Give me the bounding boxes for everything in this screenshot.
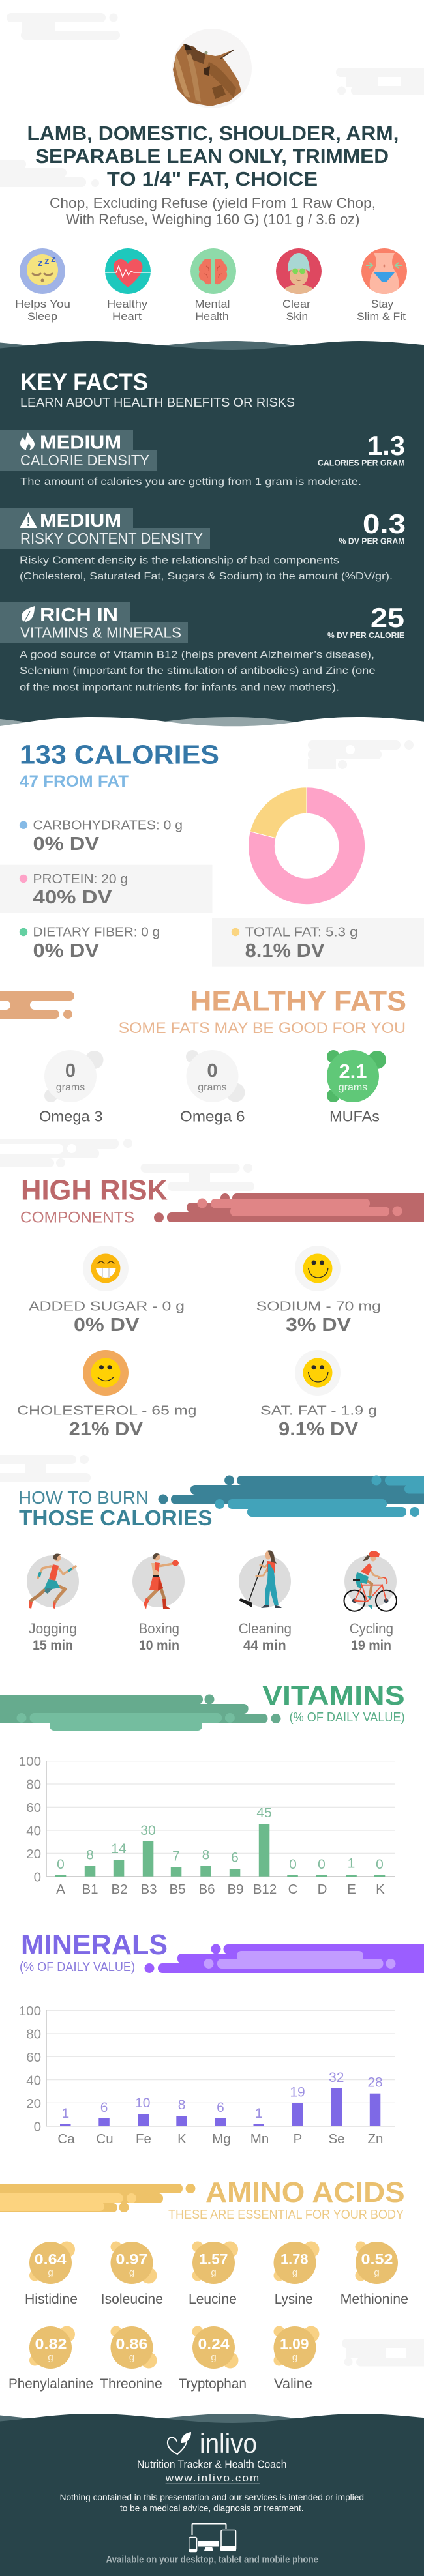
risk item: added sugar: 0% DV xyxy=(74,1315,140,1336)
bar chart: vitamins: 1 xyxy=(348,1856,355,1871)
amino acid: valine: g xyxy=(292,2352,297,2363)
bar chart: vitamins: 8 xyxy=(202,1848,209,1863)
health benefit labels: Stay xyxy=(371,298,393,310)
risk item: saturated fat: SAT. FAT - 1.9 g xyxy=(260,1404,377,1418)
bar chart: minerals: 19 xyxy=(290,2085,305,2100)
bar chart: vitamins: A xyxy=(56,1882,65,1897)
heading: 133 calories: 133 CALORIES xyxy=(20,740,219,770)
macro: carbohydrates: 0% DV xyxy=(33,834,100,855)
badge: MUFAs xyxy=(327,1050,386,1125)
fact: risky content density: Risky Content density is the relationship of bad components xyxy=(20,555,339,566)
bar chart: vitamins: 0 xyxy=(376,1857,384,1872)
badge: MUFAs: 2.1 xyxy=(339,1060,367,1083)
amino acid: isoleucine: 0.97 xyxy=(115,2251,147,2268)
amino acid: leucine: 1.57 xyxy=(199,2251,228,2268)
panel: footer xyxy=(0,2414,424,2576)
subtitle: With Refuse, Weighing 160 G) (101 g / 3.6 oz) xyxy=(66,211,360,227)
risk item: saturated fat: 9.1% DV xyxy=(279,1419,359,1440)
macro: dietary fiber xyxy=(20,926,160,961)
title xyxy=(27,122,399,190)
macro: total fat xyxy=(212,918,424,967)
amino acid: lysine: 1.78 xyxy=(280,2251,309,2268)
amino acid: valine xyxy=(274,2326,320,2392)
decorative bar: high risk xyxy=(154,1193,424,1222)
fact: rich in vitamins and minerals: A good source of Vitamin B12 (helps prevent Alzheimer’s disease), xyxy=(20,649,374,661)
fact: risky content density: 0.3 xyxy=(363,508,406,539)
activity: jogging: 15 min xyxy=(33,1638,73,1653)
fact: calorie density: CALORIE DENSITY xyxy=(20,452,149,469)
badge: omega 3: Omega 3 xyxy=(39,1108,103,1125)
fact: rich in vitamins and minerals: RICH IN xyxy=(40,605,118,626)
bar chart: vitamins: K xyxy=(376,1882,385,1897)
decorative bar: healthy fats xyxy=(0,991,74,1019)
disclaimer: to be a medical advice, diagnosis or treatment. xyxy=(120,2503,304,2513)
background cloud: left of high risk xyxy=(0,1139,132,1167)
subheading: learn about: LEARN ABOUT HEALTH BENEFITS OR RISKS xyxy=(20,396,295,410)
activity: cycling: Cycling xyxy=(350,1620,393,1637)
bar chart: minerals: 80 xyxy=(26,2027,41,2042)
amino acid: phenylalanine xyxy=(8,2326,93,2392)
fact: rich in vitamins and minerals: Selenium (important for the stimulation of antibodies) and Zinc (one xyxy=(20,666,376,677)
health benefit labels xyxy=(15,298,406,323)
bar chart: minerals: 28 xyxy=(367,2075,383,2090)
subheading: vitamins percent of daily value: (% OF DAILY VALUE) xyxy=(290,1710,405,1725)
health benefit labels: Slim & Fit xyxy=(357,310,406,323)
heading: vitamins: VITAMINS xyxy=(262,1680,405,1710)
amino acid: threonine: g xyxy=(129,2352,134,2363)
amino acid: methionine: g xyxy=(374,2267,380,2278)
amino acid: threonine: Threonine xyxy=(100,2377,162,2392)
bar chart: vitamins: 40 xyxy=(26,1824,41,1838)
amino acid: lysine: g xyxy=(292,2267,297,2278)
bar chart: vitamins: B5 xyxy=(169,1882,186,1897)
icon: clear skin xyxy=(276,248,322,295)
bar chart: minerals: 40 xyxy=(26,2073,41,2088)
macro: carbohydrates xyxy=(20,819,183,855)
heading: key facts: KEY FACTS xyxy=(20,369,148,395)
bar chart: vitamins: 0 xyxy=(34,1869,41,1885)
activity: cycling xyxy=(344,1551,397,1653)
fact: calorie density: MEDIUM xyxy=(40,433,121,454)
heading: amino acids: AMINO ACIDS xyxy=(205,2177,405,2208)
amino acid: lysine: Lysine xyxy=(275,2292,313,2307)
title: TO 1/4" FAT, CHOICE xyxy=(107,168,318,190)
fact: risky content density: % DV PER GRAM xyxy=(339,536,404,546)
amino acid: histidine xyxy=(25,2241,78,2307)
fact: risky content density: MEDIUM xyxy=(40,510,121,531)
amino acid: histidine: Histidine xyxy=(25,2292,78,2307)
panel: key facts xyxy=(0,341,424,726)
tagline: Nutrition Tracker & Health Coach xyxy=(137,2458,287,2471)
amino acid: leucine xyxy=(189,2241,238,2307)
health benefit labels: Clear xyxy=(282,298,310,310)
subheading: some fats: SOME FATS MAY BE GOOD FOR YOU xyxy=(119,1019,406,1037)
risk item: sodium: SODIUM - 70 mg xyxy=(256,1300,381,1314)
amino acid: isoleucine: Isoleucine xyxy=(101,2292,163,2307)
fact: rich in vitamins and minerals: 25 xyxy=(371,602,404,633)
bar chart: vitamins: 45 xyxy=(256,1806,272,1821)
amino acid: tryptophan: Tryptophan xyxy=(179,2377,247,2392)
amino acid: leucine: Leucine xyxy=(189,2292,237,2307)
activity: boxing xyxy=(132,1553,185,1653)
activity: cycling: 19 min xyxy=(351,1638,391,1653)
subtitle: Chop, Excluding Refuse (yield From 1 Raw Chop, xyxy=(50,195,376,211)
bar chart: vitamins: 80 xyxy=(26,1777,41,1793)
amino acid: methionine xyxy=(341,2241,408,2307)
activity: boxing: 10 min xyxy=(139,1638,179,1653)
macro: total fat: 8.1% DV xyxy=(245,941,325,961)
activity: jogging xyxy=(27,1553,79,1653)
subheading: components: COMPONENTS xyxy=(20,1209,134,1227)
fact: risky content density: (Cholesterol, Saturated Fat, Sugars & Sodium) to the amount (%DV/gr). xyxy=(20,571,393,582)
risk item: added sugar: ADDED SUGAR - 0 g xyxy=(29,1300,185,1314)
bar chart: vitamins: 0 xyxy=(289,1857,297,1872)
bar chart: vitamins: C xyxy=(288,1882,298,1897)
bar chart: vitamins: B9 xyxy=(227,1882,244,1897)
logo: inlivo xyxy=(168,2428,257,2459)
bar chart: vitamins: B2 xyxy=(111,1882,128,1897)
bar chart: vitamins: 100 xyxy=(19,1754,41,1769)
subheading: minerals percent of daily value: (% OF DAILY VALUE) xyxy=(20,1960,135,1974)
macro: dietary fiber: DIETARY FIBER: 0 g xyxy=(33,926,160,940)
bar chart: vitamins: 20 xyxy=(26,1847,41,1862)
background cloud: amino acids xyxy=(342,2339,424,2366)
bar chart: minerals: Se xyxy=(328,2131,345,2146)
bar chart: minerals: 32 xyxy=(329,2070,344,2085)
bar chart: minerals: 20 xyxy=(26,2096,41,2111)
risk item: saturated fat xyxy=(260,1350,377,1440)
icon: helps you sleep: z xyxy=(51,254,56,265)
activity: cleaning: Cleaning xyxy=(239,1620,292,1637)
subtitle xyxy=(50,195,376,227)
activity: jogging: Jogging xyxy=(29,1620,77,1637)
amino acid: leucine: g xyxy=(211,2267,217,2278)
bar chart: minerals xyxy=(19,2004,395,2146)
icon: mental health xyxy=(190,248,236,294)
background cloud: above high risk xyxy=(141,1164,254,1191)
health benefit labels: Health xyxy=(195,310,229,323)
heading: high risk: HIGH RISK xyxy=(21,1175,168,1207)
title: SEPARABLE LEAN ONLY, TRIMMED xyxy=(35,145,389,168)
bar chart: vitamins: 30 xyxy=(140,1823,156,1838)
bar chart: minerals: Zn xyxy=(368,2131,383,2146)
bar chart: vitamins: 6 xyxy=(231,1851,239,1866)
health benefit labels: Healthy xyxy=(107,298,148,310)
subheading: 47 from fat: 47 FROM FAT xyxy=(20,772,129,791)
icon: helps you sleep: z xyxy=(38,257,43,269)
amino acid: phenylalanine: Phenylalanine xyxy=(8,2377,93,2392)
bar chart: minerals: 1 xyxy=(255,2106,263,2121)
macro: protein xyxy=(0,865,213,913)
amino acid: tryptophan xyxy=(179,2326,247,2392)
health benefit labels: Heart xyxy=(112,310,142,323)
heading: those calories: THOSE CALORIES xyxy=(19,1506,213,1530)
amino acid: isoleucine xyxy=(101,2241,163,2307)
fact: rich in vitamins and minerals: of the most important nutrients for infants and new mothers). xyxy=(20,682,339,694)
heading: how to burn: HOW TO BURN xyxy=(18,1487,149,1508)
bar chart: minerals: 6 xyxy=(217,2100,224,2115)
bar chart: vitamins: 8 xyxy=(86,1848,94,1863)
amino acid: threonine: 0.86 xyxy=(115,2336,147,2352)
risk item: cholesterol xyxy=(17,1350,196,1440)
bar chart: vitamins: 14 xyxy=(111,1841,127,1856)
disclaimer xyxy=(60,2492,364,2513)
fact: risky content density: RISKY CONTENT DENSITY xyxy=(20,530,203,547)
disclaimer: Nothing contained in this presentation and our services is intended or implied xyxy=(60,2492,364,2502)
badge: omega 6: grams xyxy=(198,1082,227,1093)
amino acid: tryptophan: g xyxy=(211,2352,217,2363)
bar chart: vitamins: B6 xyxy=(198,1882,215,1897)
risk item: added sugar xyxy=(29,1246,185,1336)
badge: MUFAs: grams xyxy=(339,1082,367,1093)
risk item: sodium: 3% DV xyxy=(286,1315,352,1336)
fact: calorie density xyxy=(0,430,405,488)
decorative bar: burn calories xyxy=(158,1476,424,1517)
risk item: sodium xyxy=(256,1246,381,1336)
health benefit labels: Skin xyxy=(286,310,308,323)
bar chart: vitamins: 60 xyxy=(26,1800,41,1815)
health benefit labels: Helps You xyxy=(15,298,70,310)
heading: minerals: MINERALS xyxy=(21,1929,168,1961)
bar chart: vitamins: 7 xyxy=(172,1849,180,1864)
availability note: Available on your desktop, tablet and mobile phone xyxy=(106,2555,318,2566)
amino acid: isoleucine: g xyxy=(129,2267,134,2278)
amino acid: methionine: Methionine xyxy=(341,2292,408,2307)
fact: calorie density: CALORIES PER GRAM xyxy=(318,458,405,467)
fact: calorie density: 1.3 xyxy=(367,430,405,461)
activity: boxing: Boxing xyxy=(139,1620,179,1637)
decorative bar: amino acids xyxy=(0,2184,196,2212)
bar chart: vitamins: 0 xyxy=(57,1857,65,1872)
activity: cleaning xyxy=(239,1550,292,1653)
fact: rich in vitamins and minerals xyxy=(0,602,404,694)
amino acid: phenylalanine: g xyxy=(48,2352,53,2363)
amino acid: lysine xyxy=(274,2241,320,2307)
logo: inlivo: inlivo xyxy=(200,2428,257,2459)
background cloud: top right xyxy=(336,68,424,95)
bar chart: minerals: 60 xyxy=(26,2050,41,2065)
bar chart: minerals: Ca xyxy=(57,2131,75,2146)
fact: risky content density xyxy=(0,508,406,582)
background cloud: top left xyxy=(7,13,120,40)
bar chart: minerals: Fe xyxy=(136,2131,151,2146)
bar chart: vitamins xyxy=(19,1754,395,1897)
macro: carbohydrates: CARBOHYDRATES: 0 g xyxy=(33,819,183,833)
bar chart: vitamins: 0 xyxy=(318,1857,326,1872)
decorative bar: minerals xyxy=(145,1944,424,1973)
bar chart: vitamins: E xyxy=(347,1882,356,1897)
bar chart: minerals: Cu xyxy=(96,2131,114,2146)
bar chart: minerals: 8 xyxy=(178,2098,185,2113)
bar chart: minerals: 1 xyxy=(61,2106,69,2121)
background cloud: behind title xyxy=(0,160,99,187)
bar chart: minerals: K xyxy=(177,2131,187,2146)
amino acid: histidine: 0.64 xyxy=(35,2251,67,2268)
macro: protein: PROTEIN: 20 g xyxy=(33,872,128,886)
icon: helps you sleep: z xyxy=(44,256,50,267)
badge: MUFAs: MUFAs xyxy=(329,1108,380,1125)
health benefit labels: Sleep xyxy=(27,310,57,323)
amino acid: valine: 1.09 xyxy=(280,2336,309,2352)
amino acid: methionine: 0.52 xyxy=(361,2251,393,2268)
risk item: cholesterol: 21% DV xyxy=(69,1419,144,1440)
icon: helps you sleep xyxy=(20,248,65,294)
health benefit labels: Mental xyxy=(194,298,230,310)
macro: total fat: TOTAL FAT: 5.3 g xyxy=(245,926,357,940)
bar chart: minerals: 0 xyxy=(34,2120,41,2134)
badge: omega 3: 0 xyxy=(65,1061,76,1081)
amino acid: tryptophan: 0.24 xyxy=(198,2336,230,2352)
bar chart: minerals: 100 xyxy=(19,2004,41,2019)
bar chart: minerals: 6 xyxy=(100,2100,108,2115)
amino acid: threonine xyxy=(100,2326,162,2392)
fact: calorie density: The amount of calories you are getting from 1 gram is moderate. xyxy=(20,476,361,488)
icon: stay slim and fit xyxy=(361,248,407,295)
food image: lamb chop xyxy=(172,29,252,108)
risk item: cholesterol: CHOLESTEROL - 65 mg xyxy=(17,1404,196,1418)
amino acid: valine: Valine xyxy=(274,2377,312,2392)
decorative bar: vitamins xyxy=(0,1695,280,1731)
bar chart: minerals: Mn xyxy=(250,2131,269,2146)
icon: healthy heart xyxy=(105,248,151,294)
website link: www.inlivo.com xyxy=(165,2472,259,2484)
bar chart: vitamins: D xyxy=(318,1882,327,1897)
amino acid: phenylalanine: 0.82 xyxy=(35,2336,67,2352)
macro: dietary fiber: 0% DV xyxy=(33,941,100,961)
badge: omega 6: 0 xyxy=(207,1061,218,1081)
bar chart: vitamins: B3 xyxy=(140,1882,157,1897)
bar chart: vitamins: B1 xyxy=(82,1882,98,1897)
background cloud: burn calories xyxy=(0,1455,91,1482)
title: LAMB, DOMESTIC, SHOULDER, ARM, xyxy=(27,122,399,145)
background cloud: calories xyxy=(308,740,414,769)
badge: omega 6 xyxy=(180,1050,245,1125)
badge: omega 3 xyxy=(39,1050,103,1125)
donut chart xyxy=(249,787,365,905)
fact: rich in vitamins and minerals: % DV PER CALORIE xyxy=(327,630,404,640)
activity: cleaning: 44 min xyxy=(243,1638,286,1653)
icon: devices xyxy=(189,2524,236,2552)
amino acid: histidine: g xyxy=(48,2267,53,2278)
bar chart: vitamins: B12 xyxy=(253,1882,277,1897)
heading: healthy fats: HEALTHY FATS xyxy=(190,986,406,1017)
badge: omega 6: Omega 6 xyxy=(180,1108,245,1125)
bar chart: minerals: Mg xyxy=(212,2131,231,2146)
subheading: essential for your body: THESE ARE ESSENTIAL FOR YOUR BODY xyxy=(168,2208,404,2222)
badge: omega 3: grams xyxy=(56,1082,85,1093)
bar chart: minerals: P xyxy=(294,2131,302,2146)
fact: rich in vitamins and minerals: VITAMINS & MINERALS xyxy=(20,624,181,641)
bar chart: minerals: 10 xyxy=(135,2096,150,2111)
macro: protein: 40% DV xyxy=(33,887,112,908)
